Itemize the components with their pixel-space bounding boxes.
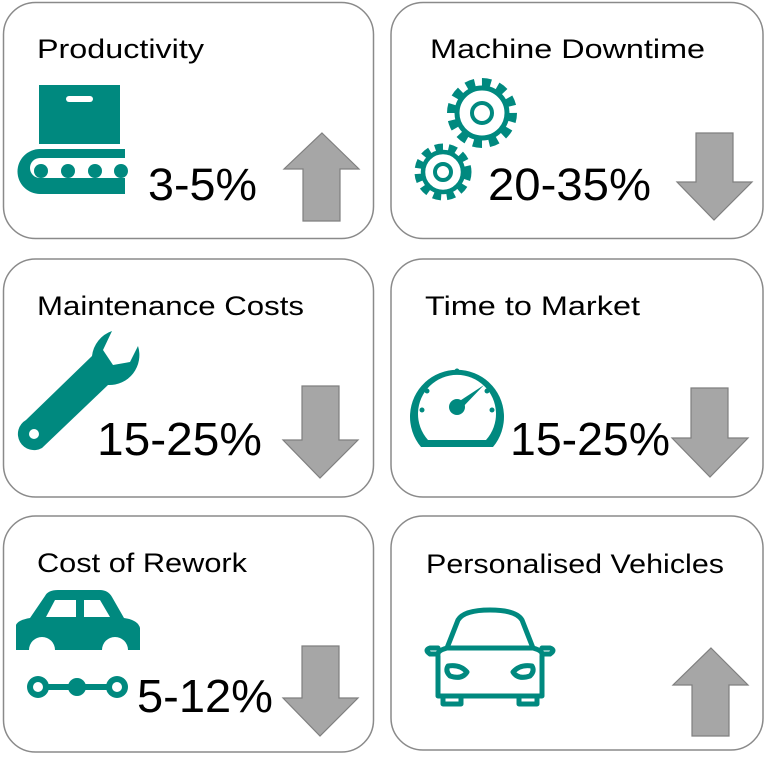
heading: Maintenance Costs [37, 291, 304, 321]
panel: cost of rework [4, 516, 374, 752]
heading: productivity: Productivity [37, 34, 205, 64]
value: 3-5% [148, 159, 257, 210]
heading: Time to Market [425, 291, 641, 321]
icon: gears [418, 82, 513, 197]
value: 5-12% [137, 670, 273, 722]
arrow down [677, 133, 752, 220]
value: 20-35% [488, 159, 651, 210]
panel: time to market [391, 259, 763, 497]
arrow down [283, 386, 358, 478]
icon: gauge [410, 368, 504, 447]
heading: Cost of Rework [37, 548, 248, 578]
arrow up [284, 133, 359, 221]
panel: productivity [4, 2, 374, 238]
icon: car side and chain [16, 590, 140, 698]
value: 15-25% [510, 413, 670, 465]
panel: maintenance costs [4, 259, 374, 497]
arrow down [672, 388, 748, 477]
arrow down [283, 646, 358, 736]
icon: wrench [18, 331, 139, 450]
value: 15-25% [97, 413, 262, 465]
icon: conveyor [18, 85, 128, 194]
icon: car front [427, 610, 553, 704]
heading: Machine Downtime [430, 34, 705, 64]
panel: personalised vehicles [391, 516, 763, 750]
arrow up [673, 648, 748, 736]
panel: machine downtime [391, 2, 763, 238]
heading: Personalised Vehicles [426, 549, 724, 579]
